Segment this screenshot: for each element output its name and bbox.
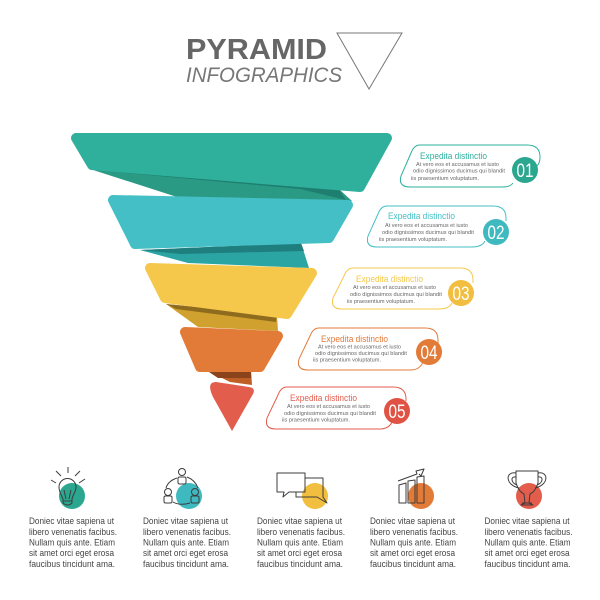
text block column 2: libero venenatis facibus.: [143, 527, 231, 537]
text block column 4: faucibus tincidunt ama.: [370, 559, 456, 569]
callout 01: At vero eos et accusamus et iusto: [416, 162, 499, 168]
funnel pyramid: [76, 138, 387, 431]
title: PYRAMID: [186, 34, 327, 66]
callout 01: [400, 145, 540, 187]
callout 05: odio dignissimos ducimus qui blandit: [284, 411, 376, 417]
callout 04: [298, 328, 442, 370]
text block column 5: Nullam quis ante. Etiam: [484, 538, 570, 548]
callout 05: At vero eos et accusamus et iusto: [287, 404, 370, 410]
text block column 1: faucibus tincidunt ama.: [29, 559, 115, 569]
icon: outlined inverted triangle: [337, 33, 402, 89]
callout 04: Expedita distinctio: [321, 334, 388, 344]
connector shadow 3: [166, 304, 278, 331]
band 3: yellow: [150, 268, 312, 314]
text block column 3: faucibus tincidunt ama.: [257, 559, 343, 569]
title: [186, 34, 342, 87]
callout 03: Expedita distinctio: [356, 274, 423, 284]
connector shadow 1: [93, 170, 352, 201]
text block column 5: faucibus tincidunt ama.: [484, 559, 570, 569]
text block column 1: [29, 516, 117, 569]
text block column 4: Nullam quis ante. Etiam: [370, 538, 456, 548]
text block column 1: Nullam quis ante. Etiam: [29, 538, 115, 548]
text block column 2: [143, 516, 231, 569]
callout 03: 03: [452, 284, 470, 305]
text block column 3: Doniec vitae sapiena ut: [257, 516, 342, 526]
icon: people network: [164, 468, 202, 509]
text block column 4: sit amet orci eget erosa: [370, 548, 455, 558]
text block column 3: Nullam quis ante. Etiam: [257, 538, 343, 548]
callout 04: iis praesentium voluptatum.: [313, 358, 381, 364]
text block column 5: libero venenatis facibus.: [484, 527, 572, 537]
icon: speech bubbles: [277, 473, 328, 509]
connector shadow 2: [140, 243, 309, 268]
text block column 5: Doniec vitae sapiena ut: [484, 516, 570, 526]
callout 05: iis praesentium voluptatum.: [282, 418, 350, 424]
icon: light bulb: [51, 467, 85, 509]
band 5: red tip: [210, 382, 254, 431]
text block column 5: [484, 516, 572, 569]
callout 05: Expedita distinctio: [290, 393, 357, 403]
text block column 2: Nullam quis ante. Etiam: [143, 538, 229, 548]
text block column 1: libero venenatis facibus.: [29, 527, 117, 537]
band 1: teal: [76, 138, 387, 187]
text block column 2: Doniec vitae sapiena ut: [143, 516, 228, 526]
text block column 2: faucibus tincidunt ama.: [143, 559, 229, 569]
text block column 4: [370, 516, 458, 569]
band 4: orange: [185, 332, 278, 367]
callout 01: Expedita distinctio: [420, 151, 487, 161]
callout 05: [266, 387, 410, 429]
callout 03: iis praesentium voluptatum.: [347, 299, 415, 305]
callout 02: 02: [488, 223, 504, 244]
text block column 4: libero venenatis facibus.: [370, 527, 458, 537]
callout 01: iis praesentium voluptatum.: [411, 176, 479, 182]
text block column 1: Doniec vitae sapiena ut: [29, 516, 114, 526]
text block column 4: Doniec vitae sapiena ut: [370, 516, 455, 526]
icon: growth bar chart: [398, 469, 434, 509]
connector shadow 4: [206, 370, 252, 385]
text block column 5: sit amet orci eget erosa: [484, 548, 570, 558]
text block column 3: [257, 516, 345, 569]
title: INFOGRAPHICS: [186, 64, 342, 87]
callout 04: At vero eos et accusamus et iusto: [318, 344, 401, 350]
callout 03: odio dignissimos ducimus qui blandit: [350, 292, 442, 298]
band 2: cyan: [113, 200, 348, 244]
callout 02: [367, 206, 509, 247]
callout 01: odio dignissimos ducimus qui blandit: [413, 168, 505, 174]
callout 02: odio dignissimos ducimus qui blandit: [382, 230, 474, 236]
callout 02: iis praesentium voluptatum.: [379, 237, 447, 243]
text block column 3: libero venenatis facibus.: [257, 527, 345, 537]
text block column 2: sit amet orci eget erosa: [143, 548, 228, 558]
callout 02: Expedita distinctio: [388, 211, 455, 221]
icon: trophy: [508, 471, 546, 509]
callout 05: 05: [388, 402, 406, 423]
text block column 1: sit amet orci eget erosa: [29, 548, 114, 558]
callout 04: 04: [420, 343, 438, 364]
callout 03: [332, 268, 474, 309]
text block column 3: sit amet orci eget erosa: [257, 548, 342, 558]
callout 01: 01: [516, 161, 534, 182]
callout 03: At vero eos et accusamus et iusto: [353, 285, 436, 291]
callout 04: odio dignissimos ducimus qui blandit: [315, 351, 407, 357]
callout 02: At vero eos et accusamus et iusto: [385, 223, 468, 229]
